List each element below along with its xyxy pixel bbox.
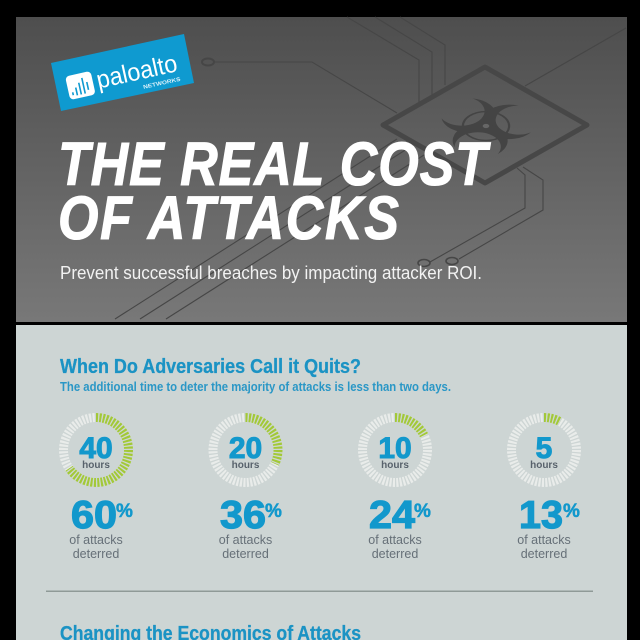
stat: 10 hours [362,418,431,561]
stat: 40 hours: 40 [79,432,113,465]
section heading: When Do Adversaries Call it Quits? [60,356,361,378]
stat: 20 hours [213,418,282,561]
icon: circuit diamond [383,67,587,183]
stat: 5 hours: % [563,501,580,522]
stat: 10 hours: hours [381,460,409,471]
section subheading: The additional time to deter the majority of attacks is less than two days. [60,380,451,394]
stat: 10 hours: of attacks [368,533,422,547]
subtitle: Prevent successful breaches by impacting attacker ROI. [60,263,482,283]
stat: 5 hours: hours [530,460,558,471]
title: OF ATTACKS [58,185,399,253]
stat: 20 hours: hours [232,460,260,471]
logo badge [51,34,194,111]
stat: 40 hours: % [116,501,133,522]
stat: 20 hours: % [265,501,282,522]
stat: 20 hours: 20 [229,432,262,465]
stat: 40 hours [64,418,133,561]
ring: 40 hours [64,418,128,482]
stat: 40 hours: hours [82,460,110,471]
stat: 20 hours: of attacks [219,533,272,547]
stat: 40 hours: 60 [71,494,117,537]
stat: 20 hours: 36 [220,494,266,537]
stat: 5 hours: of attacks [517,533,571,547]
panel: header [16,17,627,322]
circuit traces [115,17,626,319]
stat: 5 hours [512,418,580,561]
panel: when do adversaries call it quits [16,325,627,640]
logo subtext: NETWORKS [143,77,182,91]
title: THE REAL COST [58,131,491,199]
title [58,131,491,253]
icon: biohazard symbol [438,96,532,155]
stat: 20 hours: deterred [222,547,269,561]
stat: 40 hours: deterred [73,547,119,561]
stat: 10 hours: deterred [372,547,418,561]
stat: 5 hours: 5 [536,432,552,465]
stat: 10 hours: 10 [378,432,412,465]
ring: 10 hours [362,418,428,482]
stat: 5 hours: 13 [519,494,563,537]
ring: 5 hours [512,418,576,482]
icon: logo mark [65,71,96,100]
ring: 20 hours [213,418,278,482]
logo wordmark: paloalto [94,49,180,94]
stat: 5 hours: deterred [521,547,567,561]
stat: 10 hours: 24 [369,494,415,537]
stat: 40 hours: of attacks [69,533,123,547]
stat: 10 hours: % [414,501,431,522]
